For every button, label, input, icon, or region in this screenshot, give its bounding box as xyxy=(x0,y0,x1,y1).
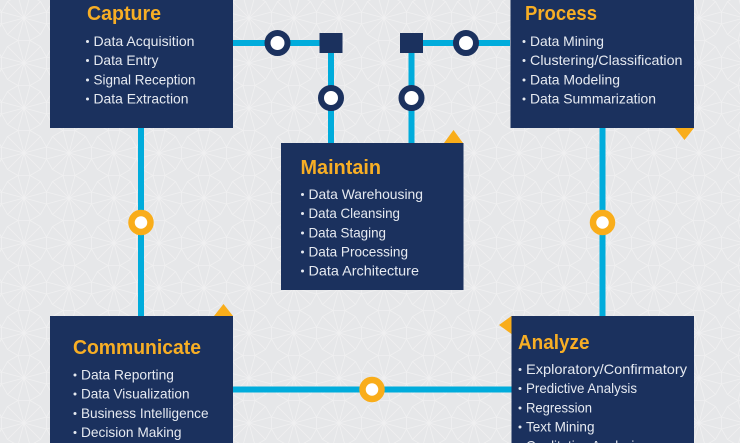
list: Process items: Data Summarization xyxy=(530,90,656,106)
list: Capture items: Data Acquisition xyxy=(94,33,194,49)
junction square: right xyxy=(400,33,423,53)
panel: Maintain xyxy=(281,143,464,290)
arrow marker: Analyze xyxy=(499,316,512,334)
connector: Process to Analyze xyxy=(593,128,612,316)
list: Maintain items xyxy=(301,186,423,278)
list: Analyze items xyxy=(518,361,687,443)
list: Maintain items: Data Architecture xyxy=(308,262,419,278)
list: Communicate items xyxy=(74,366,209,440)
connector: Communicate to Analyze xyxy=(233,380,512,399)
list: Process items: Data Mining xyxy=(530,33,604,49)
node: Capture connector horizontal xyxy=(268,33,288,53)
panel: Communicate xyxy=(50,316,233,443)
list: Communicate items: Business Intelligence xyxy=(81,405,209,421)
list: Communicate items: Data Visualization xyxy=(81,386,190,402)
heading: Analyze: Analyze xyxy=(518,332,590,354)
arrow marker: Maintain xyxy=(444,130,463,143)
arrow marker: Communicate xyxy=(214,304,233,316)
panel: Analyze xyxy=(512,316,694,443)
list: Communicate items: Data Reporting xyxy=(81,366,174,382)
heading: Maintain: Maintain xyxy=(300,157,381,179)
heading: Process: Process xyxy=(525,3,597,25)
list: Process items xyxy=(522,33,682,106)
list: Analyze items: Predictive Analysis xyxy=(526,380,637,396)
list: Capture items xyxy=(86,33,196,106)
list: Capture items: Data Entry xyxy=(94,52,158,68)
connector: Capture to Communicate xyxy=(132,128,150,316)
heading: Capture: Capture xyxy=(87,3,161,25)
list: Maintain items: Data Cleansing xyxy=(308,205,400,221)
arrow marker: Process xyxy=(675,128,694,140)
list: Analyze items: Text Mining xyxy=(526,418,594,434)
list: Analyze items: Exploratory/Confirmatory xyxy=(526,361,687,377)
connector: Process to Maintain xyxy=(400,33,510,143)
list: Capture items: Data Extraction xyxy=(94,90,188,106)
node: bottom orange xyxy=(362,380,382,399)
connector: Capture to Maintain xyxy=(233,33,342,143)
node: Capture connector vertical xyxy=(321,88,341,108)
list: Maintain items: Data Warehousing xyxy=(308,186,423,202)
list: Communicate items: Decision Making xyxy=(81,424,182,440)
panel: Process xyxy=(510,0,694,128)
list: Maintain items: Data Staging xyxy=(308,224,386,240)
heading: Communicate: Communicate xyxy=(73,337,201,359)
list: Capture items: Signal Reception xyxy=(94,72,196,88)
list: Maintain items: Data Processing xyxy=(308,244,408,260)
junction square: left xyxy=(320,33,342,53)
panel: Capture xyxy=(50,0,233,128)
node: Process connector horizontal xyxy=(456,33,476,53)
list: Process items: Data Modeling xyxy=(530,72,620,88)
list: Analyze items: Regression xyxy=(526,400,592,416)
node: right orange xyxy=(593,213,612,232)
node: Process connector vertical xyxy=(402,88,422,108)
node: left orange xyxy=(132,213,150,232)
list: Process items: Clustering/Classification xyxy=(530,52,682,68)
